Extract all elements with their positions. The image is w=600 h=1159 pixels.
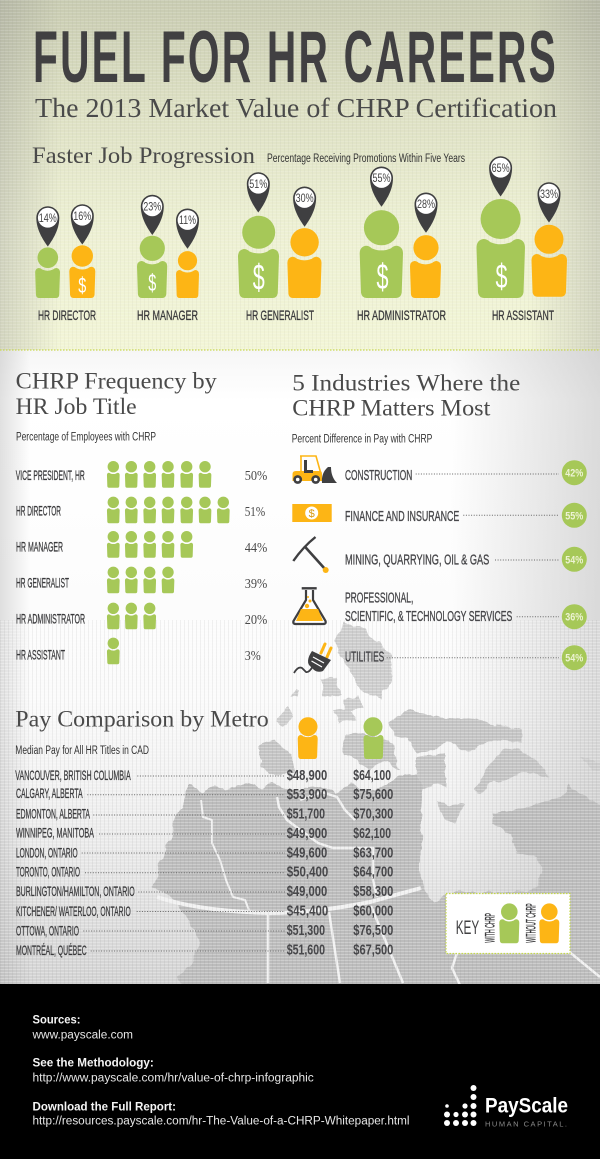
- methodology text: http://www.payscale.com/hr/value-of-chrp-infographic: [32, 1072, 314, 1084]
- group: HR manager: HR MANAGER: [137, 307, 198, 323]
- row: Burlington: $58,300: [353, 883, 393, 900]
- group: HR administrator: $: [376, 256, 388, 297]
- group: HR director: 16%: [73, 209, 92, 223]
- row: Winnipeg: [16, 824, 391, 842]
- row: finance: FINANCE AND INSURANCE: [345, 508, 459, 525]
- row: HR administrator: [16, 603, 268, 629]
- note: percentage of employees: Percentage of Employees with CHRP: [16, 432, 156, 444]
- row: Winnipeg: WINNIPEG, MANITOBA: [16, 824, 94, 840]
- row: Winnipeg: $49,900: [287, 825, 327, 842]
- group: HR generalist: [238, 172, 322, 323]
- group: HR administrator: 28%: [417, 197, 435, 211]
- group: HR manager: [137, 195, 199, 323]
- report text: http://resources.payscale.com/hr-The-Value-of-a-CHRP-Whitepaper.html: [32, 1116, 410, 1128]
- row: utilities: 54%: [565, 653, 583, 665]
- row: Vancouver: [15, 767, 391, 784]
- row: London: $63,700: [353, 844, 393, 861]
- row: HR generalist: 39%: [245, 577, 268, 592]
- row: finance: [292, 503, 587, 528]
- row: Burlington: [16, 883, 393, 900]
- group: HR director: HR DIRECTOR: [38, 307, 96, 323]
- row: Burlington: $49,000: [287, 883, 327, 900]
- row: HR generalist: [16, 567, 268, 593]
- row: construction: 42%: [565, 468, 583, 480]
- row: Toronto: TORONTO, ONTARIO: [16, 864, 80, 880]
- logo: PayScale: HUMAN CAPITAL.: [485, 1120, 567, 1129]
- group: HR generalist: HR GENERALIST: [246, 307, 314, 323]
- row: construction: [292, 456, 587, 485]
- group: HR generalist: $: [253, 256, 265, 298]
- group: HR manager: 11%: [179, 213, 196, 227]
- heading: CHRP frequency: HR Job Title: [16, 394, 137, 419]
- group: HR administrator: HR ADMINISTRATOR: [357, 307, 446, 323]
- row: Vancouver: $48,900: [287, 767, 327, 784]
- divider: header dotted line: [0, 349, 600, 351]
- group: HR assistant: [476, 156, 567, 323]
- row: HR administrator: HR ADMINISTRATOR: [16, 610, 85, 626]
- methodology text: See the Methodology:: [32, 1058, 154, 1070]
- row: Ottawa: [16, 922, 393, 939]
- row: Kitchener: $45,400: [287, 902, 328, 919]
- row: Kitchener: KITCHENER/ WATERLOO, ONTARIO: [16, 903, 131, 919]
- row: Ottawa: $51,300: [287, 922, 325, 939]
- row: HR assistant: HR ASSISTANT: [16, 646, 65, 662]
- icon: orange person column: [298, 717, 318, 759]
- subtitle: The 2013 Market Value of CHRP Certification: [35, 93, 558, 123]
- heading: five industries: 5 Industries Where the: [292, 371, 520, 396]
- background: green header panel: [0, 0, 600, 350]
- row: HR director: [16, 497, 265, 523]
- text: WITHOUT CHRP: [522, 903, 538, 943]
- row: professional services: [293, 588, 587, 629]
- row: HR manager: HR MANAGER: [16, 539, 63, 555]
- row: professional services: 36%: [565, 612, 583, 624]
- row: HR administrator: 20%: [245, 613, 268, 628]
- group: HR administrator: [357, 166, 446, 323]
- row: Edmonton: $51,700: [287, 806, 325, 823]
- row: Winnipeg: $62,100: [353, 825, 391, 842]
- group: HR director: $: [78, 273, 86, 298]
- row: Toronto: $50,400: [287, 864, 328, 881]
- row: HR assistant: 3%: [245, 649, 261, 664]
- row: London: [16, 844, 393, 861]
- row: Kitchener: $60,000: [353, 902, 393, 919]
- group: HR manager: 23%: [143, 200, 162, 214]
- icon: green person column: [364, 717, 384, 759]
- row: utilities: [294, 644, 587, 673]
- methodology text: [32, 1058, 314, 1084]
- heading: five industries: CHRP Matters Most: [292, 395, 491, 420]
- group: HR administrator: 55%: [372, 171, 391, 185]
- row: mining: MINING, QUARRYING, OIL & GAS: [345, 552, 489, 569]
- report text: [32, 1101, 410, 1128]
- row: HR generalist: HR GENERALIST: [16, 575, 69, 591]
- row: Calgary: $75,600: [353, 786, 393, 803]
- group: HR assistant: HR ASSISTANT: [492, 307, 554, 323]
- icon: money: [292, 504, 332, 522]
- background: light grey lower panel: [0, 350, 600, 985]
- row: Edmonton: EDMONTON, ALBERTA: [16, 806, 90, 822]
- group: HR director: 14%: [39, 211, 57, 225]
- row: HR manager: 44%: [245, 541, 268, 556]
- row: mining: [293, 537, 587, 573]
- map of Canada: [0, 620, 600, 1000]
- report text: Download the Full Report:: [32, 1101, 176, 1113]
- chart note: promotions: Percentage Receiving Promotions Within Five Years: [267, 153, 465, 165]
- legend: key: KEY: [456, 918, 479, 939]
- heading: pay comparison: Pay Comparison by Metro: [15, 707, 269, 732]
- panel: pay comparison: [15, 707, 393, 958]
- icon: money: $: [309, 508, 315, 520]
- row: HR director: 51%: [245, 505, 265, 520]
- logo: PayScale: PayScale: [485, 1095, 568, 1118]
- row: finance: 55%: [565, 510, 583, 522]
- row: Ottawa: OTTOWA, ONTARIO: [16, 923, 79, 939]
- row: Toronto: [16, 864, 393, 881]
- note: median pay: Median Pay for All HR Titles in CAD: [15, 745, 149, 757]
- group: HR generalist: 30%: [296, 191, 314, 205]
- panel: five industries: [292, 371, 587, 673]
- group: HR generalist: 51%: [249, 177, 268, 191]
- group: HR manager: $: [148, 270, 156, 297]
- panel: CHRP frequency: [16, 368, 268, 664]
- row: utilities: UTILITIES: [345, 649, 384, 666]
- row: HR director: HR DIRECTOR: [16, 503, 61, 519]
- row: Toronto: $64,700: [353, 864, 393, 881]
- group: HR director: [35, 204, 96, 323]
- note: percent difference: Percent Difference in Pay with CHRP: [292, 433, 433, 445]
- heading: CHRP frequency: [16, 368, 217, 419]
- row: vice president: VICE PRESIDENT, HR: [16, 467, 85, 483]
- row: HR assistant: [16, 638, 261, 664]
- footer panel: [0, 984, 600, 1159]
- row: London: $49,600: [287, 844, 327, 861]
- row: vice president: [16, 461, 268, 488]
- row: Montreal: $51,600: [287, 941, 325, 958]
- row: Montreal: [16, 941, 393, 958]
- group: HR assistant: 33%: [540, 187, 558, 201]
- legend: key: WITH CHRP: [482, 913, 498, 943]
- icon: forklift: [292, 456, 337, 484]
- icon: plug: [294, 644, 331, 673]
- row: Edmonton: $70,300: [353, 806, 393, 823]
- heading: five industries: [292, 371, 520, 420]
- sources text: www.payscale.com: [31, 1030, 133, 1042]
- group: HR assistant: 65%: [492, 161, 510, 175]
- logo: PayScale: [444, 1085, 568, 1129]
- icon: flask: [293, 588, 326, 624]
- group: HR assistant: $: [496, 258, 508, 296]
- icon: pickaxe: [293, 537, 329, 573]
- row: Edmonton: [16, 806, 393, 823]
- row: Burlington: BURLINGTON/HAMILTON, ONTARIO: [16, 883, 135, 899]
- row: Calgary: $53,900: [287, 786, 327, 803]
- row: Ottawa: $76,500: [353, 922, 393, 939]
- heading: faster job progression: Faster Job Progression: [32, 143, 256, 168]
- heading: CHRP frequency: CHRP Frequency by: [16, 368, 217, 393]
- row: Kitchener: [16, 902, 393, 919]
- row: London: LONDON, ONTARIO: [16, 844, 78, 860]
- row: Vancouver: $64,100: [353, 767, 391, 784]
- row: Calgary: [16, 785, 393, 803]
- row: Vancouver: VANCOUVER, BRITISH COLUMBIA: [15, 767, 131, 783]
- row: construction: CONSTRUCTION: [345, 467, 412, 484]
- row: HR manager: [16, 531, 268, 558]
- row: professional services: PROFESSIONAL,: [345, 590, 413, 607]
- sources text: [31, 1014, 133, 1042]
- row: Calgary: CALGARY, ALBERTA: [16, 785, 83, 801]
- legend: key: [446, 894, 570, 954]
- row: vice president: 50%: [245, 469, 268, 484]
- row: Montreal: $67,500: [353, 941, 393, 958]
- sources text: Sources:: [32, 1014, 80, 1026]
- row: mining: 54%: [565, 554, 583, 566]
- row: Montreal: MONTRÉAL, QUÉBEC: [16, 942, 87, 958]
